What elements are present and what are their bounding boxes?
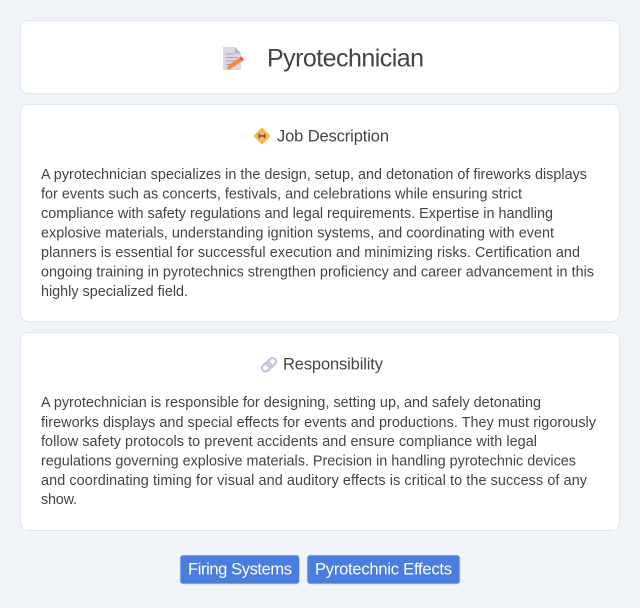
text block: responsibility: fireworks displays and special effects for events and productions. They must rigorously	[41, 415, 597, 431]
icon: chain link	[260, 356, 278, 373]
text block: job description: ongoing training in pyrotechnics strengthen proficiency and career advancement in this	[41, 264, 594, 280]
panel: responsibility	[20, 332, 620, 530]
title: Pyrotechnician	[267, 44, 424, 72]
text block: responsibility: A pyrotechnician is responsible for designing, setting up, and safely detonating	[41, 395, 541, 411]
text block: job description: highly specialized field.	[41, 284, 188, 300]
tag: firing systems: Firing Systems	[188, 560, 292, 578]
heading: responsibility: Responsibility	[283, 356, 384, 374]
text block: responsibility: show.	[41, 492, 77, 508]
text block: job description	[41, 167, 594, 300]
tag: pyrotechnic effects	[307, 555, 460, 584]
text block: job description: for events such as concerts, festivals, and celebrations while ensuring strict	[41, 186, 522, 202]
panel: job description	[20, 104, 620, 322]
text block: job description: planners is essential for successful execution and minimizing risks. Certification and	[41, 245, 580, 261]
tag: firing systems	[180, 555, 300, 584]
heading: job description: Job Description	[277, 128, 389, 146]
text block: responsibility: regulations governing explosive materials. Precision in handling pyrotechnic devices	[41, 454, 576, 470]
icon: orange diamond sign	[253, 127, 271, 145]
text block: responsibility: follow safety protocols to prevent accidents and ensure compliance with legal	[41, 434, 537, 450]
icon: document with pencil	[223, 47, 244, 70]
panel: title card	[20, 20, 620, 94]
text block: job description: A pyrotechnician specializes in the design, setup, and detonation of fireworks displays	[41, 167, 587, 183]
text block: job description: compliance with safety regulations and legal requirements. Expertise in handling	[41, 206, 553, 222]
text block: responsibility	[41, 395, 597, 508]
tag: pyrotechnic effects: Pyrotechnic Effects	[315, 560, 452, 578]
text block: responsibility: and coordinating timing for visual and auditory effects is critical to the success of any	[41, 473, 588, 489]
text block: job description: explosive materials, understanding ignition systems, and coordinating with event	[41, 226, 554, 242]
